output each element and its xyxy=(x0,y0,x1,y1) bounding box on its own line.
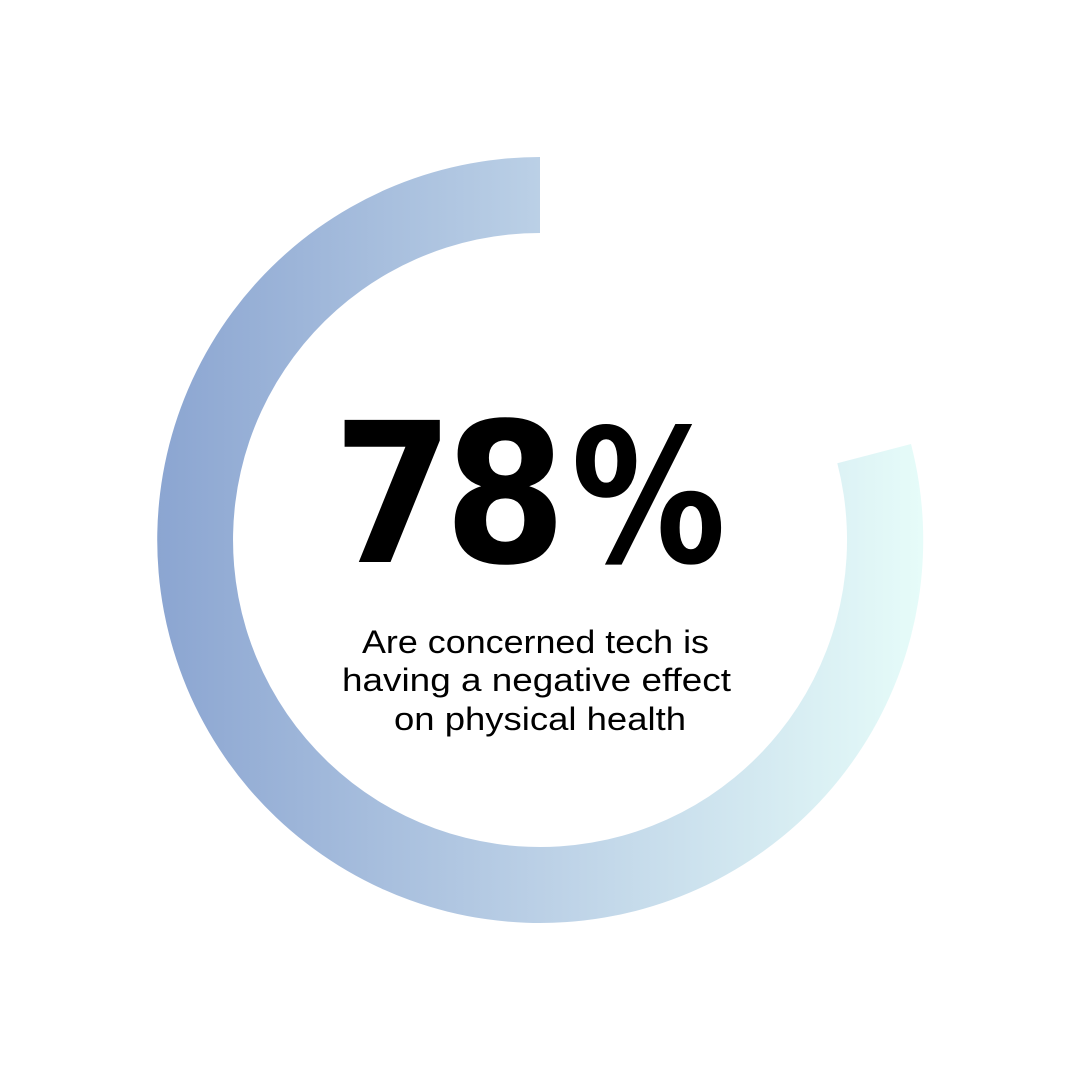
big number: 78%: 8 xyxy=(444,381,567,608)
caption line 3: on physical health xyxy=(394,701,686,737)
caption text xyxy=(342,624,731,737)
big number: 78%: 7 xyxy=(333,381,454,608)
caption line 1: Are concerned tech is xyxy=(362,624,709,660)
big number: 78%: % xyxy=(571,389,726,606)
donut chart: 78 percent arc xyxy=(157,157,923,923)
caption line 2: having a negative effect xyxy=(342,662,731,698)
big number: 78% xyxy=(333,381,726,608)
